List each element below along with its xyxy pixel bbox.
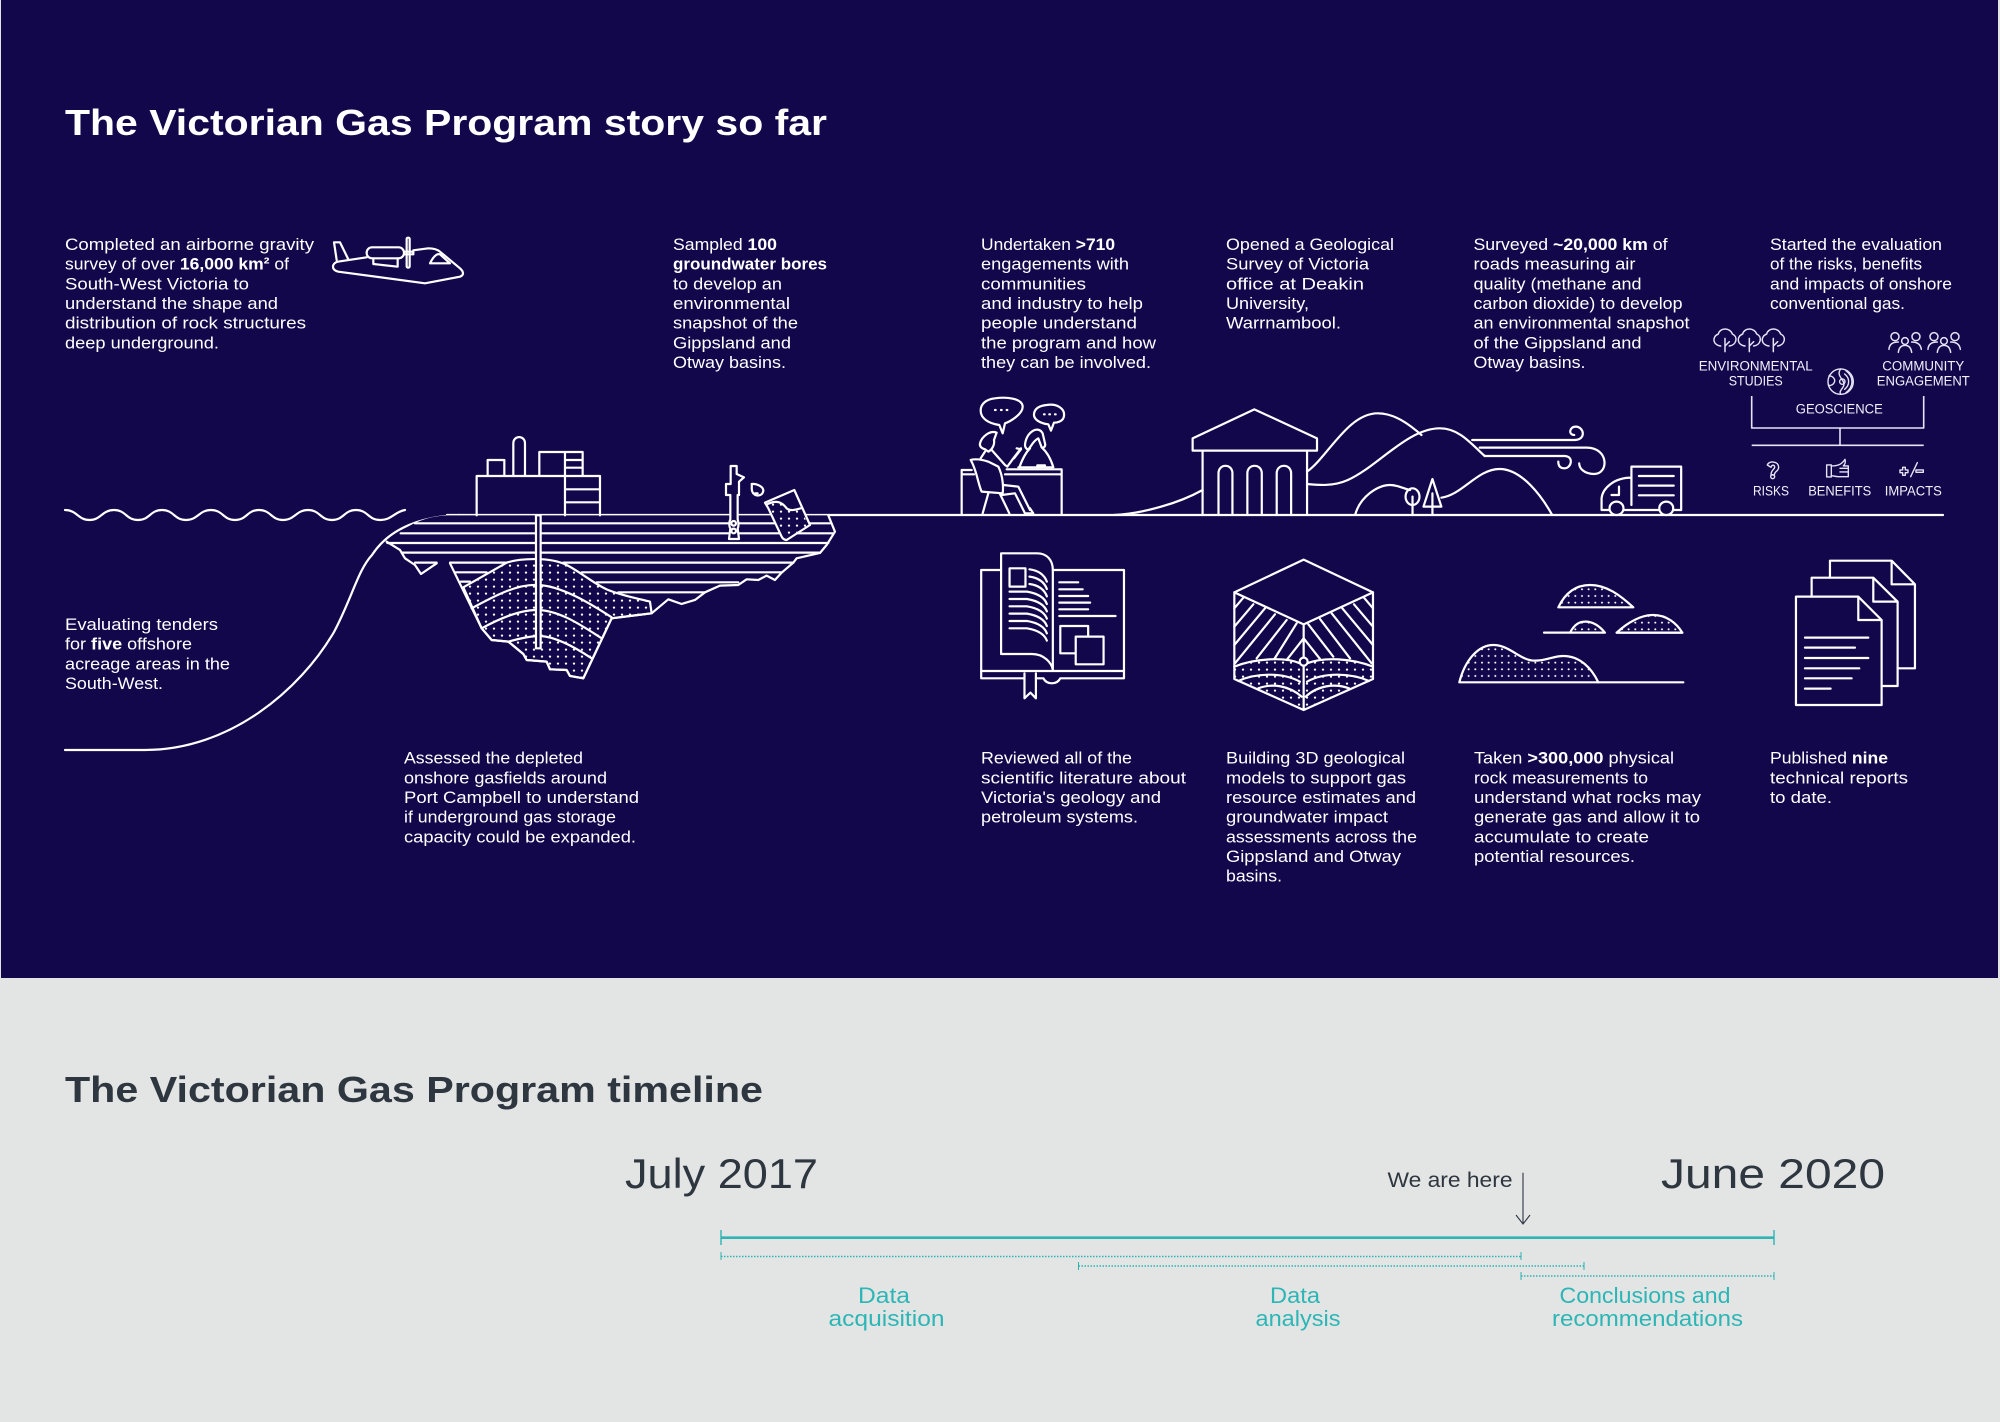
bore well — [536, 515, 541, 648]
text: air quality survey: Surveyed ~20,000 km of — [1474, 236, 1668, 254]
dotted reservoir — [463, 559, 652, 678]
text: groundwater bores: snapshot of the — [673, 315, 798, 333]
icon: people — [1889, 333, 1960, 352]
sea floor curve — [65, 515, 460, 750]
text: airborne gravity survey — [65, 236, 315, 352]
icon: trees — [1714, 329, 1784, 352]
text: offshore tenders: for five offshore — [65, 636, 192, 654]
text: air quality survey — [1474, 236, 1690, 372]
text: air quality survey: of the Gippsland and — [1474, 334, 1642, 352]
text: 3D geological models — [1226, 750, 1417, 886]
icon: open book — [981, 553, 1124, 698]
text: offshore tenders — [65, 616, 230, 693]
text: literature review: Reviewed all of the — [981, 750, 1132, 768]
label: conclusions and recommendations — [1552, 1283, 1743, 1331]
bracket — [1752, 396, 1924, 445]
text: airborne gravity survey: Completed an airborne gravity — [65, 236, 315, 254]
text: engagements — [981, 236, 1156, 372]
heading: timeline: The Victorian Gas Program timeline — [65, 1069, 763, 1110]
text: evaluation started: and impacts of onshore — [1770, 275, 1952, 293]
icon: globe — [1828, 369, 1853, 394]
icon: water sample beaker — [765, 490, 810, 540]
icon: rock sample mounds — [1459, 585, 1683, 682]
text: geological survey office — [1226, 236, 1394, 333]
icon: 3D geological cube — [1234, 560, 1373, 710]
text: rock measurements — [1474, 750, 1702, 866]
text: groundwater bores: to develop an — [673, 275, 782, 293]
text: 3D geological models: assessments across the — [1226, 828, 1417, 846]
labels: evaluation streams: STUDIES — [1729, 373, 1783, 388]
text: groundwater bores: environmental — [673, 295, 790, 313]
text: literature review: scientific literature about — [981, 769, 1186, 787]
label: data analysis: Data — [1270, 1283, 1321, 1308]
text: evaluation started: conventional gas. — [1770, 295, 1905, 313]
text: airborne gravity survey: distribution of rock structures — [65, 315, 306, 333]
diagram: evaluation framework — [1699, 329, 1970, 498]
text: depleted gasfields: onshore gasfields around — [404, 769, 607, 787]
panel: story so far — [1, 0, 1998, 978]
text: groundwater bores: groundwater bores — [673, 256, 827, 274]
label: data acquisition: Data — [858, 1283, 911, 1308]
text: geological survey office: University, — [1226, 295, 1309, 313]
text: depleted gasfields: Assessed the depleted — [404, 750, 583, 768]
timeline phase: data acquisition — [721, 1252, 1521, 1260]
text: technical reports published: technical reports — [1770, 769, 1908, 787]
label: end date: June 2020 — [1661, 1150, 1885, 1197]
icon: plus minus — [1900, 463, 1923, 477]
panel: timeline background — [0, 978, 2000, 1422]
text: groundwater bores: Sampled 100 — [673, 236, 777, 254]
text: offshore tenders: Evaluating tenders — [65, 616, 218, 634]
text: technical reports published: to date. — [1770, 789, 1832, 807]
text: groundwater bores: Otway basins. — [673, 354, 786, 372]
labels: evaluation streams: GEOSCIENCE — [1796, 401, 1883, 416]
icon: sea waves — [65, 510, 405, 520]
platform — [477, 437, 600, 515]
text: 3D geological models: Building 3D geological — [1226, 750, 1405, 768]
text: air quality survey: carbon dioxide) to develop — [1474, 295, 1682, 313]
text: engagements: Undertaken >710 — [981, 236, 1115, 254]
text: literature review — [981, 750, 1186, 827]
label: data analysis: analysis — [1256, 1306, 1340, 1331]
icon: water drop — [752, 484, 763, 496]
text: literature review: Victoria's geology and — [981, 789, 1161, 807]
illustration: survey truck — [1602, 467, 1681, 515]
text: technical reports published — [1770, 750, 1908, 807]
illustration: gas field cross-section — [387, 437, 835, 678]
text: evaluation started: Started the evaluation — [1770, 236, 1942, 254]
text: air quality survey: an environmental snapshot — [1474, 315, 1690, 333]
text: geological survey office: office at Deakin — [1226, 275, 1364, 293]
icon: well head — [726, 466, 744, 539]
illustration: geological survey office building — [1114, 409, 1317, 515]
text: groundwater bores — [673, 236, 827, 372]
text: geological survey office: Opened a Geological — [1226, 236, 1394, 254]
text: rock measurements: potential resources. — [1474, 848, 1635, 866]
strata — [387, 515, 835, 678]
text: air quality survey: quality (methane and — [1474, 275, 1642, 293]
title: The Victorian Gas Program story so far — [65, 102, 827, 143]
text: engagements: engagements with — [981, 256, 1129, 274]
text: engagements: people understand — [981, 315, 1137, 333]
icon: plane — [333, 238, 463, 283]
labels: evaluation streams: COMMUNITY — [1882, 359, 1964, 374]
text: depleted gasfields: if underground gas storage — [404, 809, 616, 827]
labels: outcomes: RISKS — [1753, 483, 1789, 498]
label: conclusions and recommendations: Conclusions and — [1560, 1283, 1730, 1308]
text: 3D geological models: models to support gas — [1226, 769, 1406, 787]
text: rock measurements: understand what rocks may — [1474, 789, 1702, 807]
text: rock measurements: accumulate to create — [1474, 828, 1649, 846]
arrow: current position — [1516, 1173, 1530, 1224]
illustration: wind lines — [1472, 427, 1605, 474]
label: start date: July 2017 — [625, 1150, 818, 1197]
labels: outcomes: IMPACTS — [1885, 483, 1942, 498]
labels: evaluation streams: ENVIRONMENTAL — [1699, 359, 1813, 374]
text: offshore tenders: South-West. — [65, 675, 163, 693]
text: literature review: petroleum systems. — [981, 809, 1138, 827]
text: 3D geological models: groundwater impact — [1226, 809, 1388, 827]
ground line — [447, 514, 1943, 516]
text: rock measurements: rock measurements to — [1474, 769, 1648, 787]
text: airborne gravity survey: understand the shape and — [65, 295, 278, 313]
timeline phase: data analysis — [1078, 1262, 1584, 1270]
text: 3D geological models: resource estimates and — [1226, 789, 1416, 807]
text: 3D geological models: basins. — [1226, 868, 1282, 886]
text: engagements: the program and how — [981, 334, 1156, 352]
icon: thumbs up — [1827, 459, 1848, 477]
text: engagements: they can be involved. — [981, 354, 1151, 372]
illustration: hills and trees — [1307, 413, 1552, 515]
text: offshore tenders: acreage areas in the — [65, 655, 230, 673]
label: we are here: We are here — [1388, 1169, 1512, 1192]
text: depleted gasfields: capacity could be expanded. — [404, 828, 636, 846]
labels: outcomes: BENEFITS — [1808, 483, 1871, 498]
labels: evaluation streams — [1699, 359, 1970, 416]
icon: question mark — [1767, 462, 1779, 479]
label: data acquisition: acquisition — [828, 1306, 944, 1331]
text: depleted gasfields — [404, 750, 639, 846]
text: technical reports published: Published nine — [1770, 750, 1888, 768]
label: conclusions and recommendations: recommendations — [1552, 1306, 1743, 1331]
text: airborne gravity survey: deep underground. — [65, 334, 219, 352]
label: data analysis — [1256, 1283, 1340, 1331]
text: 3D geological models: Gippsland and Otway — [1226, 848, 1402, 866]
text: engagements: communities — [981, 275, 1086, 293]
text: rock measurements: generate gas and allow it to — [1474, 809, 1700, 827]
labels: outcomes — [1753, 483, 1942, 498]
labels: evaluation streams: ENGAGEMENT — [1877, 373, 1970, 388]
timeline bar — [721, 1230, 1774, 1245]
text: evaluation started — [1770, 236, 1952, 313]
text: air quality survey: Otway basins. — [1474, 354, 1586, 372]
text: engagements: and industry to help — [981, 295, 1143, 313]
label: data acquisition — [828, 1283, 944, 1331]
text: air quality survey: roads measuring air — [1474, 256, 1636, 274]
icon: technical reports — [1796, 561, 1915, 705]
text: geological survey office: Warrnambool. — [1226, 315, 1341, 333]
text: rock measurements: Taken >300,000 physical — [1474, 750, 1674, 768]
text: airborne gravity survey: survey of over 16,000 km² of — [65, 256, 289, 274]
illustration: people talking at desk — [962, 398, 1064, 514]
text: geological survey office: Survey of Victoria — [1226, 256, 1370, 274]
text: evaluation started: of the risks, benefits — [1770, 256, 1922, 274]
text: groundwater bores: Gippsland and — [673, 334, 791, 352]
text: depleted gasfields: Port Campbell to understand — [404, 789, 639, 807]
timeline phase: conclusions — [1521, 1272, 1774, 1280]
text: airborne gravity survey: South-West Victoria to — [65, 275, 249, 293]
